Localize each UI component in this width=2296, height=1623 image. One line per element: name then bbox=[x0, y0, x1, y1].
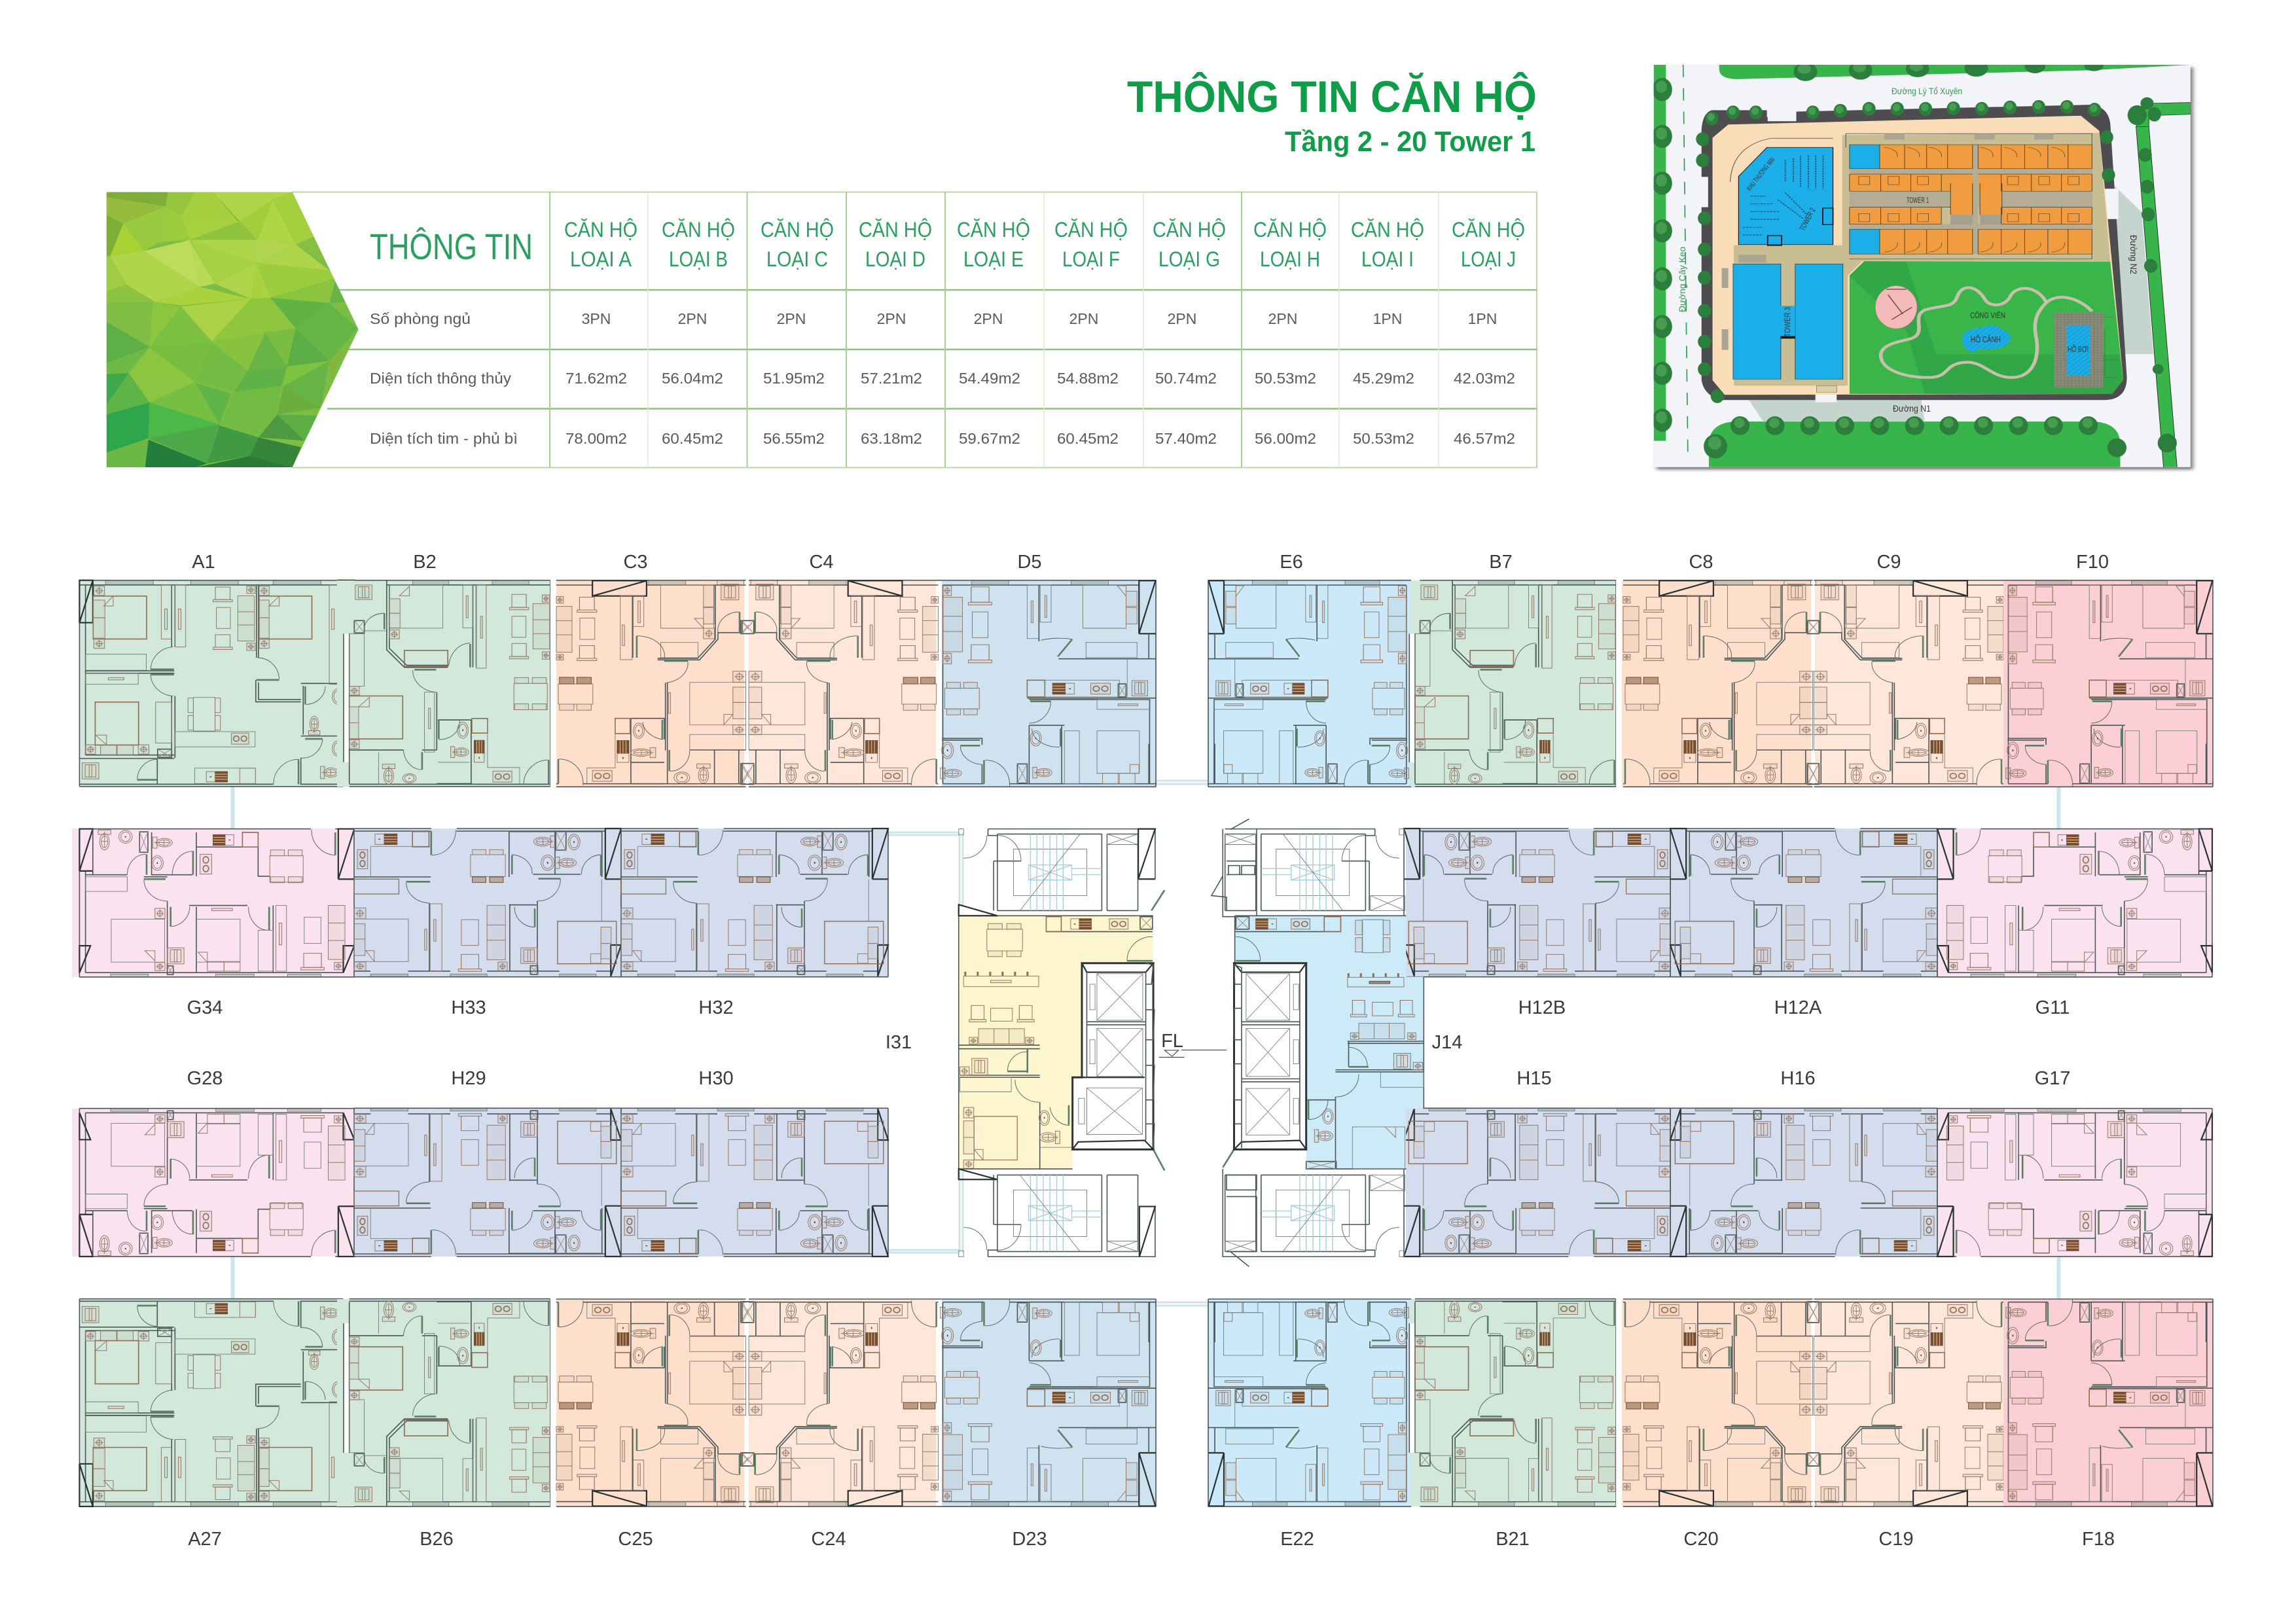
site plan labels: HỒ CẢNH bbox=[1971, 334, 2001, 344]
row: diện tích tim - phủ bì: Diện tích tim - phủ bì bbox=[370, 430, 518, 447]
column headers bbox=[564, 218, 1525, 271]
unit labels top row: B7 bbox=[1489, 552, 1513, 573]
unit labels top row bbox=[192, 552, 2109, 573]
site plan labels: CÔNG VIÊN bbox=[1970, 310, 2005, 320]
unit labels top row: E6 bbox=[1280, 552, 1303, 573]
column headers: LOẠI J bbox=[1461, 247, 1516, 271]
column headers: LOẠI H bbox=[1260, 247, 1320, 271]
table heading: THÔNG TIN: THÔNG TIN bbox=[370, 226, 533, 267]
unit H32 bbox=[621, 829, 888, 977]
core labels: FL bbox=[1161, 1031, 1183, 1052]
row: số phòng ngủ: 2PN bbox=[877, 310, 906, 327]
unit labels bottom row: F18 bbox=[2082, 1529, 2115, 1550]
row: số phòng ngủ: Số phòng ngủ bbox=[370, 310, 471, 327]
low-poly green hexagon decoration bbox=[107, 192, 359, 468]
unit labels second row bbox=[187, 997, 2070, 1018]
row: diện tích thông thủy: Diện tích thông thủy bbox=[370, 370, 512, 387]
unit F10 bbox=[2003, 580, 2213, 787]
column headers: CĂN HỘ bbox=[1452, 218, 1525, 241]
unit J14 bbox=[1235, 916, 1424, 1169]
unit C19 bbox=[1807, 1299, 2003, 1507]
row: số phòng ngủ: 3PN bbox=[582, 310, 611, 327]
row: diện tích thông thủy: 51.95m2 bbox=[763, 370, 825, 387]
unit H16 bbox=[1670, 1108, 1937, 1257]
section marker FL bbox=[1159, 1050, 1227, 1057]
staircases bbox=[959, 819, 1405, 1266]
panel: floor plan bbox=[72, 552, 2213, 1550]
unit H33 bbox=[354, 829, 621, 977]
unit labels bottom row: C24 bbox=[811, 1529, 846, 1550]
site plan labels: TOWER 1 bbox=[1907, 196, 1929, 205]
unit labels top row: F10 bbox=[2076, 552, 2109, 573]
row: diện tích tim - phủ bì: 78.00m2 bbox=[565, 430, 627, 447]
row: diện tích thông thủy: 50.53m2 bbox=[1255, 370, 1316, 387]
row: diện tích tim - phủ bì: 60.45m2 bbox=[662, 430, 723, 447]
unit C9 bbox=[1807, 580, 2003, 787]
unit H12A bbox=[1670, 829, 1937, 977]
unit labels bottom row: C19 bbox=[1878, 1529, 1914, 1550]
elevators left bbox=[1073, 963, 1155, 1149]
row: diện tích tim - phủ bì: 56.55m2 bbox=[763, 430, 825, 447]
row: diện tích thông thủy: 50.74m2 bbox=[1155, 370, 1217, 387]
unit labels second row: H33 bbox=[451, 997, 486, 1018]
unit labels bottom row bbox=[188, 1529, 2115, 1550]
row: diện tích tim - phủ bì: 46.57m2 bbox=[1454, 430, 1515, 447]
unit labels top row: D5 bbox=[1017, 552, 1042, 573]
unit E6 bbox=[1208, 580, 1411, 787]
column headers: LOẠI A bbox=[570, 247, 632, 271]
title: THÔNG TIN CĂN HỘ bbox=[1127, 71, 1537, 122]
unit labels bottom row: D23 bbox=[1012, 1529, 1047, 1550]
unit labels second row: H12B bbox=[1518, 997, 1566, 1018]
unit G34 bbox=[72, 829, 354, 977]
unit D23 bbox=[938, 1299, 1156, 1507]
row: số phòng ngủ: 2PN bbox=[1069, 310, 1098, 327]
column headers: CĂN HỘ bbox=[1153, 218, 1226, 241]
unit labels bottom row: C25 bbox=[618, 1529, 653, 1550]
corridor lines bbox=[232, 781, 2060, 1306]
column headers: CĂN HỘ bbox=[564, 218, 637, 241]
row: diện tích thông thủy bbox=[370, 370, 1515, 387]
row: diện tích thông thủy: 71.62m2 bbox=[565, 370, 627, 387]
site plan labels bbox=[1677, 86, 2139, 414]
site plan labels: HỒ BƠI bbox=[2068, 344, 2089, 354]
unit labels third row: H30 bbox=[698, 1068, 734, 1089]
unit H30 bbox=[621, 1108, 888, 1257]
unit H15 bbox=[1404, 1108, 1671, 1257]
unit labels third row bbox=[187, 1068, 2070, 1089]
row: số phòng ngủ bbox=[370, 310, 1497, 327]
row: diện tích thông thủy: 42.03m2 bbox=[1454, 370, 1515, 387]
unit labels top row: C9 bbox=[1876, 552, 1901, 573]
unit B7 bbox=[1409, 580, 1621, 787]
column headers: LOẠI I bbox=[1361, 247, 1414, 271]
core labels bbox=[886, 1031, 1462, 1053]
unit B21 bbox=[1409, 1299, 1621, 1507]
row: số phòng ngủ: 2PN bbox=[1168, 310, 1196, 327]
building core with units I31 and J14 bbox=[959, 819, 1424, 1266]
core labels: I31 bbox=[886, 1032, 912, 1053]
unit C20 bbox=[1622, 1299, 1820, 1507]
row: diện tích tim - phủ bì: 60.45m2 bbox=[1057, 430, 1119, 447]
column headers: CĂN HỘ bbox=[957, 218, 1030, 241]
column headers: LOẠI G bbox=[1158, 247, 1220, 271]
unit C8 bbox=[1622, 580, 1820, 787]
unit C24 bbox=[742, 1299, 939, 1507]
row: diện tích tim - phủ bì: 50.53m2 bbox=[1353, 430, 1414, 447]
site plan labels: KHU THƯƠNG MẠI bbox=[1746, 156, 1776, 192]
column headers: LOẠI E bbox=[963, 247, 1024, 271]
site plan labels: Đường Lý Tổ Xuyên bbox=[1892, 86, 1962, 96]
unit labels third row: H15 bbox=[1516, 1068, 1552, 1089]
row: số phòng ngủ: 2PN bbox=[1268, 310, 1297, 327]
panel: apartment information table bbox=[107, 192, 1537, 468]
unit C4 bbox=[742, 580, 939, 787]
unit labels second row: H12A bbox=[1774, 997, 1822, 1018]
column headers: CĂN HỘ bbox=[761, 218, 834, 241]
unit B2 bbox=[337, 580, 556, 787]
column headers: LOẠI B bbox=[669, 247, 728, 271]
unit labels top row: A1 bbox=[192, 552, 215, 573]
row: số phòng ngủ: 2PN bbox=[678, 310, 707, 327]
unit H12B bbox=[1404, 829, 1671, 977]
unit G28 bbox=[72, 1109, 354, 1257]
row: diện tích thông thủy: 56.04m2 bbox=[662, 370, 723, 387]
core labels: J14 bbox=[1432, 1032, 1462, 1053]
column headers: CĂN HỘ bbox=[1351, 218, 1424, 241]
unit labels top row: B2 bbox=[413, 552, 437, 573]
unit G17 bbox=[1937, 1109, 2212, 1257]
column headers: CĂN HỘ bbox=[1054, 218, 1128, 241]
row: diện tích tim - phủ bì bbox=[370, 430, 1515, 447]
unit labels bottom row: C20 bbox=[1683, 1529, 1719, 1550]
unit labels bottom row: E22 bbox=[1280, 1529, 1314, 1550]
unit labels top row: C3 bbox=[623, 552, 648, 573]
elevators right bbox=[1234, 963, 1306, 1149]
unit C25 bbox=[556, 1299, 753, 1507]
unit A1 bbox=[79, 580, 354, 787]
table grid bbox=[292, 192, 1537, 467]
row: diện tích thông thủy: 57.21m2 bbox=[861, 370, 922, 387]
unit D5 bbox=[938, 580, 1156, 787]
unit labels third row: G17 bbox=[2035, 1068, 2070, 1089]
unit labels bottom row: A27 bbox=[188, 1529, 222, 1550]
unit labels third row: G28 bbox=[187, 1068, 223, 1089]
column headers: LOẠI D bbox=[865, 247, 925, 271]
row: số phòng ngủ: 2PN bbox=[974, 310, 1003, 327]
unit B26 bbox=[337, 1299, 556, 1507]
unit labels bottom row: B26 bbox=[420, 1529, 454, 1550]
unit A27 bbox=[79, 1299, 354, 1507]
unit C3 bbox=[556, 580, 753, 787]
unit I31 bbox=[959, 904, 1153, 1179]
column headers: LOẠI F bbox=[1062, 247, 1120, 271]
unit labels top row: C8 bbox=[1689, 552, 1713, 573]
site plan drawing bbox=[1652, 59, 2191, 469]
panel: site plan bbox=[1652, 59, 2191, 469]
column headers: LOẠI C bbox=[766, 247, 828, 271]
row: diện tích thông thủy: 54.88m2 bbox=[1057, 370, 1119, 387]
unit E22 bbox=[1208, 1299, 1411, 1507]
unit labels second row: G34 bbox=[187, 997, 223, 1018]
site plan labels: TOWER 2 bbox=[1797, 206, 1818, 232]
column headers: CĂN HỘ bbox=[662, 218, 735, 241]
site plan labels: TOWER 3 bbox=[1783, 307, 1792, 337]
row: diện tích thông thủy: 45.29m2 bbox=[1353, 370, 1414, 387]
unit F18 bbox=[2003, 1299, 2213, 1507]
row: diện tích tim - phủ bì: 59.67m2 bbox=[959, 430, 1020, 447]
site plan labels: Đường N2 bbox=[2128, 235, 2139, 274]
unit G11 bbox=[1937, 829, 2212, 977]
row: diện tích thông thủy: 54.49m2 bbox=[959, 370, 1020, 387]
unit H29 bbox=[354, 1108, 621, 1257]
row: diện tích tim - phủ bì: 57.40m2 bbox=[1155, 430, 1217, 447]
row: số phòng ngủ: 1PN bbox=[1373, 310, 1402, 327]
row: số phòng ngủ: 1PN bbox=[1468, 310, 1497, 327]
row: diện tích tim - phủ bì: 63.18m2 bbox=[861, 430, 922, 447]
unit labels bottom row: B21 bbox=[1496, 1529, 1530, 1550]
site plan labels: Đường Cây Keo bbox=[1677, 247, 1687, 312]
unit labels second row: H32 bbox=[698, 997, 734, 1018]
row: số phòng ngủ: 2PN bbox=[777, 310, 806, 327]
row: diện tích tim - phủ bì: 56.00m2 bbox=[1255, 430, 1316, 447]
column headers: CĂN HỘ bbox=[859, 218, 932, 241]
site plan labels: Đường N1 bbox=[1893, 403, 1931, 414]
unit labels second row: G11 bbox=[2036, 997, 2070, 1018]
unit labels third row: H16 bbox=[1780, 1068, 1816, 1089]
unit labels top row: C4 bbox=[809, 552, 834, 573]
column headers: CĂN HỘ bbox=[1253, 218, 1327, 241]
subtitle: Tầng 2 - 20 Tower 1 bbox=[1285, 126, 1535, 158]
unit labels third row: H29 bbox=[451, 1068, 486, 1089]
